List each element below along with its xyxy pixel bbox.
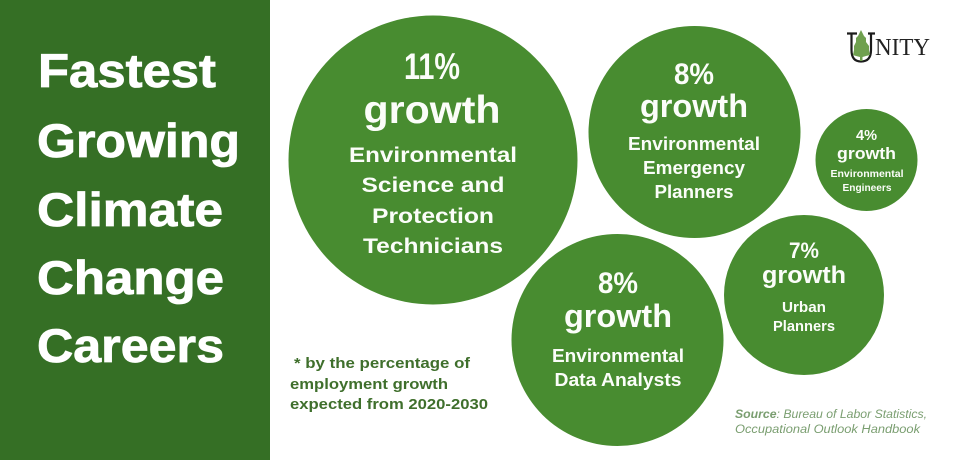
- bubble: Environmental Science and Protection Technicians: 11%: [404, 46, 460, 87]
- title: Climate: [37, 183, 223, 236]
- source note: Occupational Outlook Handbook: [735, 424, 921, 436]
- bubble: Environmental Science and Protection Technicians: growth: [364, 89, 500, 132]
- bubble: Environmental Data Analysts: 8%: [598, 267, 638, 300]
- icon: pine tree: [853, 30, 870, 61]
- bubble: Environmental Emergency Planners: Planners: [654, 181, 734, 202]
- logo wordmark: NITY: [875, 35, 930, 61]
- bubble: Urban Planners: growth: [762, 262, 846, 289]
- title: [37, 44, 240, 372]
- bubble: Environmental Engineers: Engineers: [842, 182, 892, 194]
- logo: Unity: [847, 30, 930, 62]
- source note: [735, 409, 927, 436]
- logo letter U: [847, 34, 875, 62]
- title: Growing: [37, 114, 240, 167]
- bubble: Environmental Engineers: [816, 109, 918, 211]
- bubble: Environmental Emergency Planners: Emergency: [643, 157, 746, 178]
- bubble: Environmental Data Analysts: growth: [564, 298, 672, 334]
- bubble: Environmental Emergency Planners: growth: [640, 88, 748, 124]
- bubble: Environmental Emergency Planners: 8%: [674, 58, 714, 91]
- panel: title sidebar: [0, 0, 270, 460]
- footnote: employment growth: [290, 376, 448, 393]
- bubble: Environmental Data Analysts: Environmental: [552, 345, 684, 366]
- bubble: Environmental Engineers: Environmental: [830, 168, 904, 180]
- bubble: Urban Planners: Urban: [782, 300, 826, 316]
- bubble: Environmental Data Analysts: [512, 234, 724, 446]
- footnote: expected from 2020-2030: [290, 396, 488, 413]
- bubble: Urban Planners: Planners: [773, 319, 835, 335]
- bubble: Environmental Engineers: 4%: [856, 127, 877, 144]
- bubble: Environmental Science and Protection Technicians: Environmental: [349, 143, 517, 167]
- bubble: Urban Planners: [724, 215, 884, 375]
- bubble: Environmental Science and Protection Technicians: Protection: [372, 204, 494, 228]
- bubble: Environmental Data Analysts: Data Analysts: [554, 369, 682, 390]
- source note: Source: Bureau of Labor Statistics,: [735, 409, 927, 421]
- title: Change: [37, 251, 224, 304]
- bubble: Environmental Science and Protection Technicians: [288, 16, 578, 304]
- bubble: Environmental Emergency Planners: [588, 26, 800, 238]
- title: Fastest: [38, 44, 216, 97]
- bubble: Environmental Science and Protection Technicians: Technicians: [363, 234, 503, 258]
- footnote: * by the percentage of: [294, 355, 471, 372]
- bubble: Environmental Emergency Planners: Environmental: [628, 133, 760, 154]
- bubble: Environmental Engineers: growth: [837, 144, 896, 163]
- bubble: Urban Planners: 7%: [789, 238, 819, 263]
- bubble: Environmental Science and Protection Technicians: Science and: [362, 173, 504, 197]
- footnote: [290, 355, 488, 413]
- title: Careers: [37, 319, 224, 372]
